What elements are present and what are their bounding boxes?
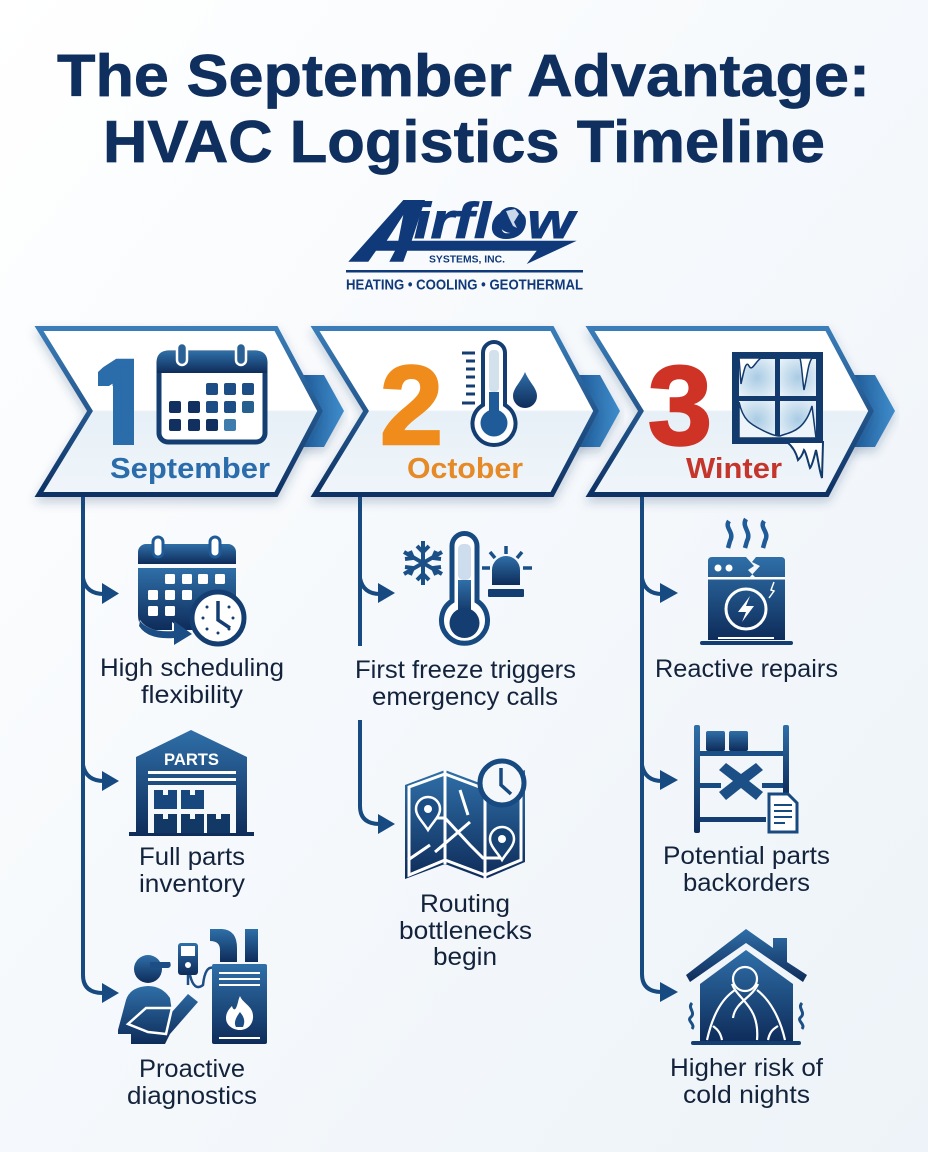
step number 2: 2: [380, 343, 443, 468]
label: emergency calls: [372, 683, 558, 711]
banner: September: [39, 328, 344, 494]
step number 3: 3: [648, 343, 712, 468]
item: Reactive repairs: [655, 519, 838, 683]
logo: Airflow Systems: irflow: [414, 193, 578, 249]
icon: thermometer and drop: [462, 342, 537, 445]
icon: technician with meter and furnace: [118, 929, 267, 1044]
item: Higher risk of cold nights: [670, 929, 823, 1109]
icon: map with route and clock: [405, 761, 525, 879]
icon: snowflake, thermometer, alarm beacon: [404, 534, 532, 643]
label: begin: [433, 943, 497, 971]
logo: Airflow Systems: SYSTEMS, INC.: [429, 254, 505, 266]
label: [100, 654, 284, 709]
label: inventory: [139, 870, 246, 898]
logo: Airflow Systems: [346, 193, 583, 294]
label: Full parts: [139, 843, 245, 871]
icon: calendar: [157, 343, 267, 442]
icon: calendar with clock: [138, 537, 245, 646]
title: [57, 43, 870, 175]
icon: empty shelf with cross and document: [694, 725, 797, 833]
timeline connector: September: [83, 497, 119, 1003]
icon: broken furnace with steam: [700, 519, 793, 645]
month label: October: October: [407, 453, 523, 485]
label: Potential parts: [663, 842, 830, 870]
label: [399, 890, 532, 971]
timeline connector: Winter: [642, 497, 678, 1002]
label: Reactive repairs: [655, 655, 838, 683]
item: Full parts inventory: [129, 730, 254, 898]
icon: parts warehouse: [129, 730, 254, 836]
label: Routing: [420, 890, 510, 918]
label: High scheduling: [100, 654, 284, 682]
label: [670, 1054, 823, 1109]
title: The September Advantage:: [57, 43, 870, 109]
label: First freeze triggers: [355, 656, 576, 684]
label: [139, 843, 246, 898]
title: HVAC Logistics Timeline: [103, 109, 825, 175]
label: diagnostics: [127, 1082, 257, 1110]
label: Proactive: [139, 1055, 245, 1083]
icon: frosted window: [732, 352, 823, 478]
icon: house with shivering person: [686, 929, 807, 1045]
month label: September: September: [110, 453, 270, 485]
item: Proactive diagnostics: [118, 929, 267, 1110]
logo: Airflow Systems: HEATING • COOLING • GEOTHERMAL: [346, 276, 583, 294]
label: Higher risk of: [670, 1054, 823, 1082]
banner: Winter: [590, 328, 895, 494]
month label: Winter: Winter: [686, 453, 782, 485]
label: [663, 842, 830, 897]
item: High scheduling flexibility: [100, 537, 284, 709]
item: First freeze triggers emergency calls: [355, 534, 576, 711]
icon: parts warehouse: PARTS: [164, 750, 219, 769]
label: backorders: [683, 869, 810, 897]
item: Routing bottlenecks begin: [399, 761, 532, 971]
label: bottlenecks: [399, 917, 532, 945]
label: [127, 1055, 257, 1110]
label: cold nights: [683, 1081, 810, 1109]
banner: October: [315, 328, 620, 494]
item: Potential parts backorders: [663, 725, 830, 897]
label: [355, 656, 576, 711]
timeline connector: October: [360, 497, 395, 834]
step number 1: 1: [89, 338, 155, 470]
label: flexibility: [141, 681, 244, 709]
